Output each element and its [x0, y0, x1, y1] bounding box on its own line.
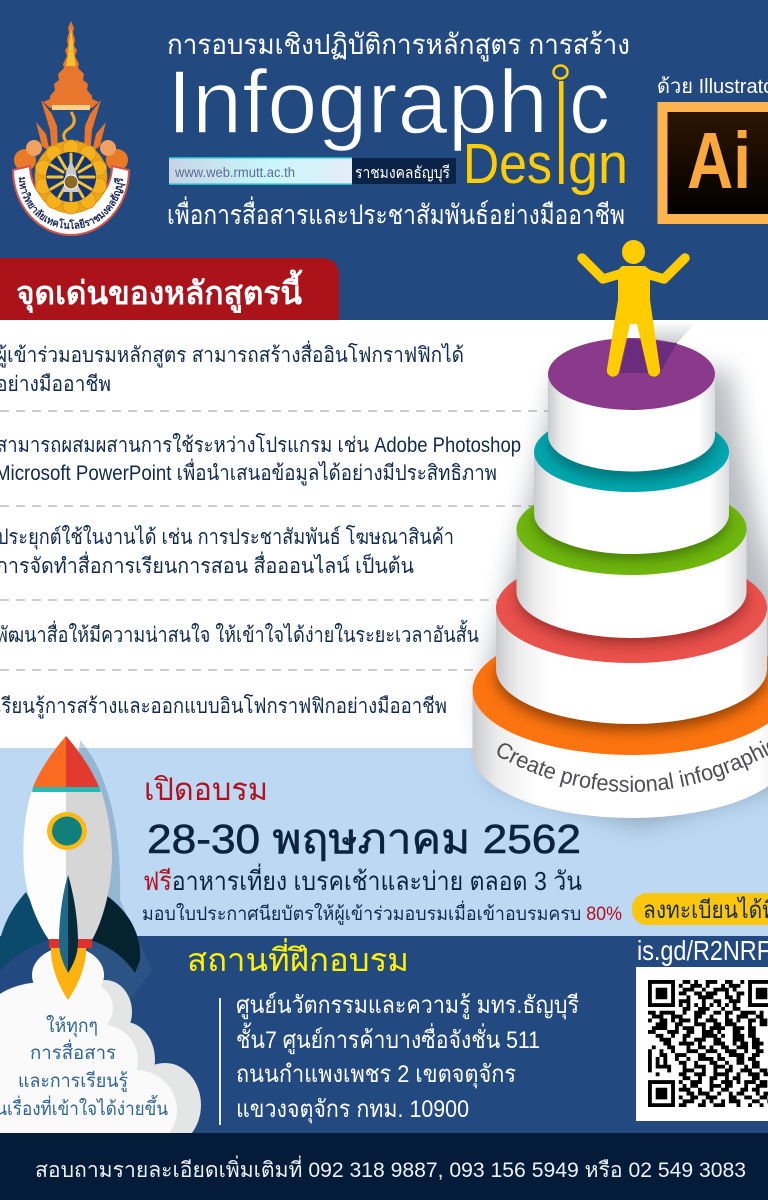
logo: blue sun disc [46, 152, 96, 202]
panel: training date [0, 748, 768, 936]
venue heading: สถานที่ฝึกอบรม [187, 938, 409, 978]
item 2: Microsoft PowerPoint เพื่อนำเสนอข้อมูลได้อย่างมีประสิทธิภาพ [0, 458, 497, 486]
item 2: สามารถผสมผสานการใช้ระหว่างโปรแกรม เช่น Adobe Photoshop [0, 433, 521, 457]
title word: Des: Des [463, 132, 552, 196]
heading line two: เพื่อการสื่อสารและประชาสัมพันธ์อย่างมืออาชีพ [167, 196, 625, 230]
item 5: เรียนรู้การสร้างและออกแบบอินโฟกราฟฟิกอย่างมืออาชีพ [0, 694, 447, 719]
venue address: ชั้น7 ศูนย์การค้าบางซื่อจังชั่น 511 [236, 1022, 540, 1055]
rocket teal band [32, 787, 101, 792]
heading line one: การอบรมเชิงปฏิบัติการหลักสูตร การสร้าง [167, 29, 630, 62]
logo: seal name: มหาวิทยาลัยเทคโนโลยีราชมงคลธัญบุรี [18, 176, 126, 230]
cloud message: ให้ทุกๆ [46, 1015, 98, 1038]
title word: Infograph: Infograph [167, 53, 548, 153]
item 3: ประยุกต์ใช้ในงานได้ เช่น การประชาสัมพันธ์ โฆษณาสินค้า [0, 525, 454, 550]
title letter: c: c [569, 53, 610, 153]
logo: side rosettes [14, 149, 36, 171]
rocket nose red [66, 736, 99, 787]
cloud message: การสื่อสาร [30, 1039, 116, 1064]
tiered cake chart [468, 325, 768, 836]
illustration: rocket and cloud [0, 736, 201, 1150]
logo: spire [43, 21, 99, 108]
tier 4: red [496, 579, 767, 724]
flame [51, 946, 86, 1000]
item 3: การจัดทำสื่อการเรียนการสอน สื่อออนไลน์ เป็นต้น [0, 551, 414, 578]
QR code [636, 967, 768, 1121]
item 3 [0, 525, 454, 578]
venue address: ศูนย์นวัตกรรมและความรู้ มทร.ธัญบุรี [236, 991, 579, 1020]
website label [352, 158, 456, 184]
contact phone numbers: สอบถามรายละเอียดเพิ่มเติมที่ 092 318 9887, 093 156 5949 หรือ 02 549 3083 [35, 1155, 746, 1182]
highlights heading tab [0, 258, 339, 320]
logo: naga side ornaments [36, 100, 106, 156]
logo: white seal banner [13, 166, 129, 235]
rocket shadow [60, 740, 152, 1000]
venue address [219, 991, 579, 1125]
QR data modules [648, 982, 768, 1105]
date section text [142, 772, 622, 925]
training dates: 28-30 พฤษภาคม 2562 [147, 816, 581, 862]
footer bar [0, 1133, 768, 1200]
website url field: www.web.rmutt.ac.th [174, 165, 295, 180]
tier 1: purple [548, 322, 715, 472]
highlights heading tab: จุดเด่นของหลักสูตรนี้ [16, 269, 303, 314]
title word: gn: gn [568, 132, 628, 196]
website url field [169, 157, 352, 185]
free meals: ฟรีอาหารเที่ยง เบรคเช้าและบ่าย ตลอด 3 วัน [143, 863, 582, 896]
logo: central emblem [63, 160, 79, 192]
right fin [90, 890, 140, 973]
item 2 [0, 433, 521, 486]
tier 3: green [516, 504, 746, 638]
title shared yellow i [554, 66, 568, 184]
rocket body left half [23, 790, 66, 940]
venue address: แขวงจตุจักร กทม. 10900 [236, 1096, 469, 1124]
center fin [59, 875, 78, 973]
item 1: ผู้เข้าร่วมอบรมหลักสูตร สามารถสร้างสื่ออินโฟกราฟฟิกได้ [0, 340, 464, 368]
tier 5: orange with slogan [472, 656, 768, 818]
left fin [0, 892, 50, 976]
cloud message [0, 1015, 168, 1120]
panel: training venue [0, 936, 768, 1133]
icon: Adobe Illustrator [658, 102, 768, 224]
item 4: พัฒนาสื่อให้มีความน่าสนใจ ให้เข้าใจได้ง่ายในระยะเวลาอันสั้น [0, 620, 479, 647]
QR finder patterns [648, 980, 768, 1107]
rocket nose orange [33, 736, 66, 787]
cloud message: และการเรียนรู้ [18, 1070, 128, 1092]
cloud shadow layer [100, 980, 201, 1133]
icon: person with raised arms [582, 240, 685, 377]
certificate note: มอบใบประกาศนียบัตรให้ผู้เข้าร่วมอบรมเมื่อเข้าอบรมครบ 80% [142, 900, 622, 925]
logo: inner flame [64, 112, 78, 144]
opening label: เปิดอบรม [144, 772, 268, 807]
item 1 [0, 340, 464, 396]
website bar [169, 157, 456, 185]
red collar [49, 939, 92, 948]
title: Infographic Design [167, 53, 628, 196]
highlights list [0, 340, 521, 719]
website label: ราชมงคลธัญบุรี [355, 164, 450, 183]
tier 2: teal [534, 432, 729, 554]
tower drop shadow [480, 370, 768, 826]
panel: course highlights [0, 320, 768, 748]
rocket body right half [66, 790, 112, 940]
venue address: ถนนกำแพงเพชร 2 เขตจตุจักร [236, 1061, 516, 1089]
cloud white layer [0, 947, 177, 1150]
rocket window [47, 812, 87, 850]
logo: gold rosette ring [35, 140, 107, 214]
cloud of smoke with message [0, 947, 201, 1150]
header background [0, 0, 768, 320]
icon: Adobe Illustrator: Ai [687, 116, 751, 205]
university logo [12, 21, 130, 236]
